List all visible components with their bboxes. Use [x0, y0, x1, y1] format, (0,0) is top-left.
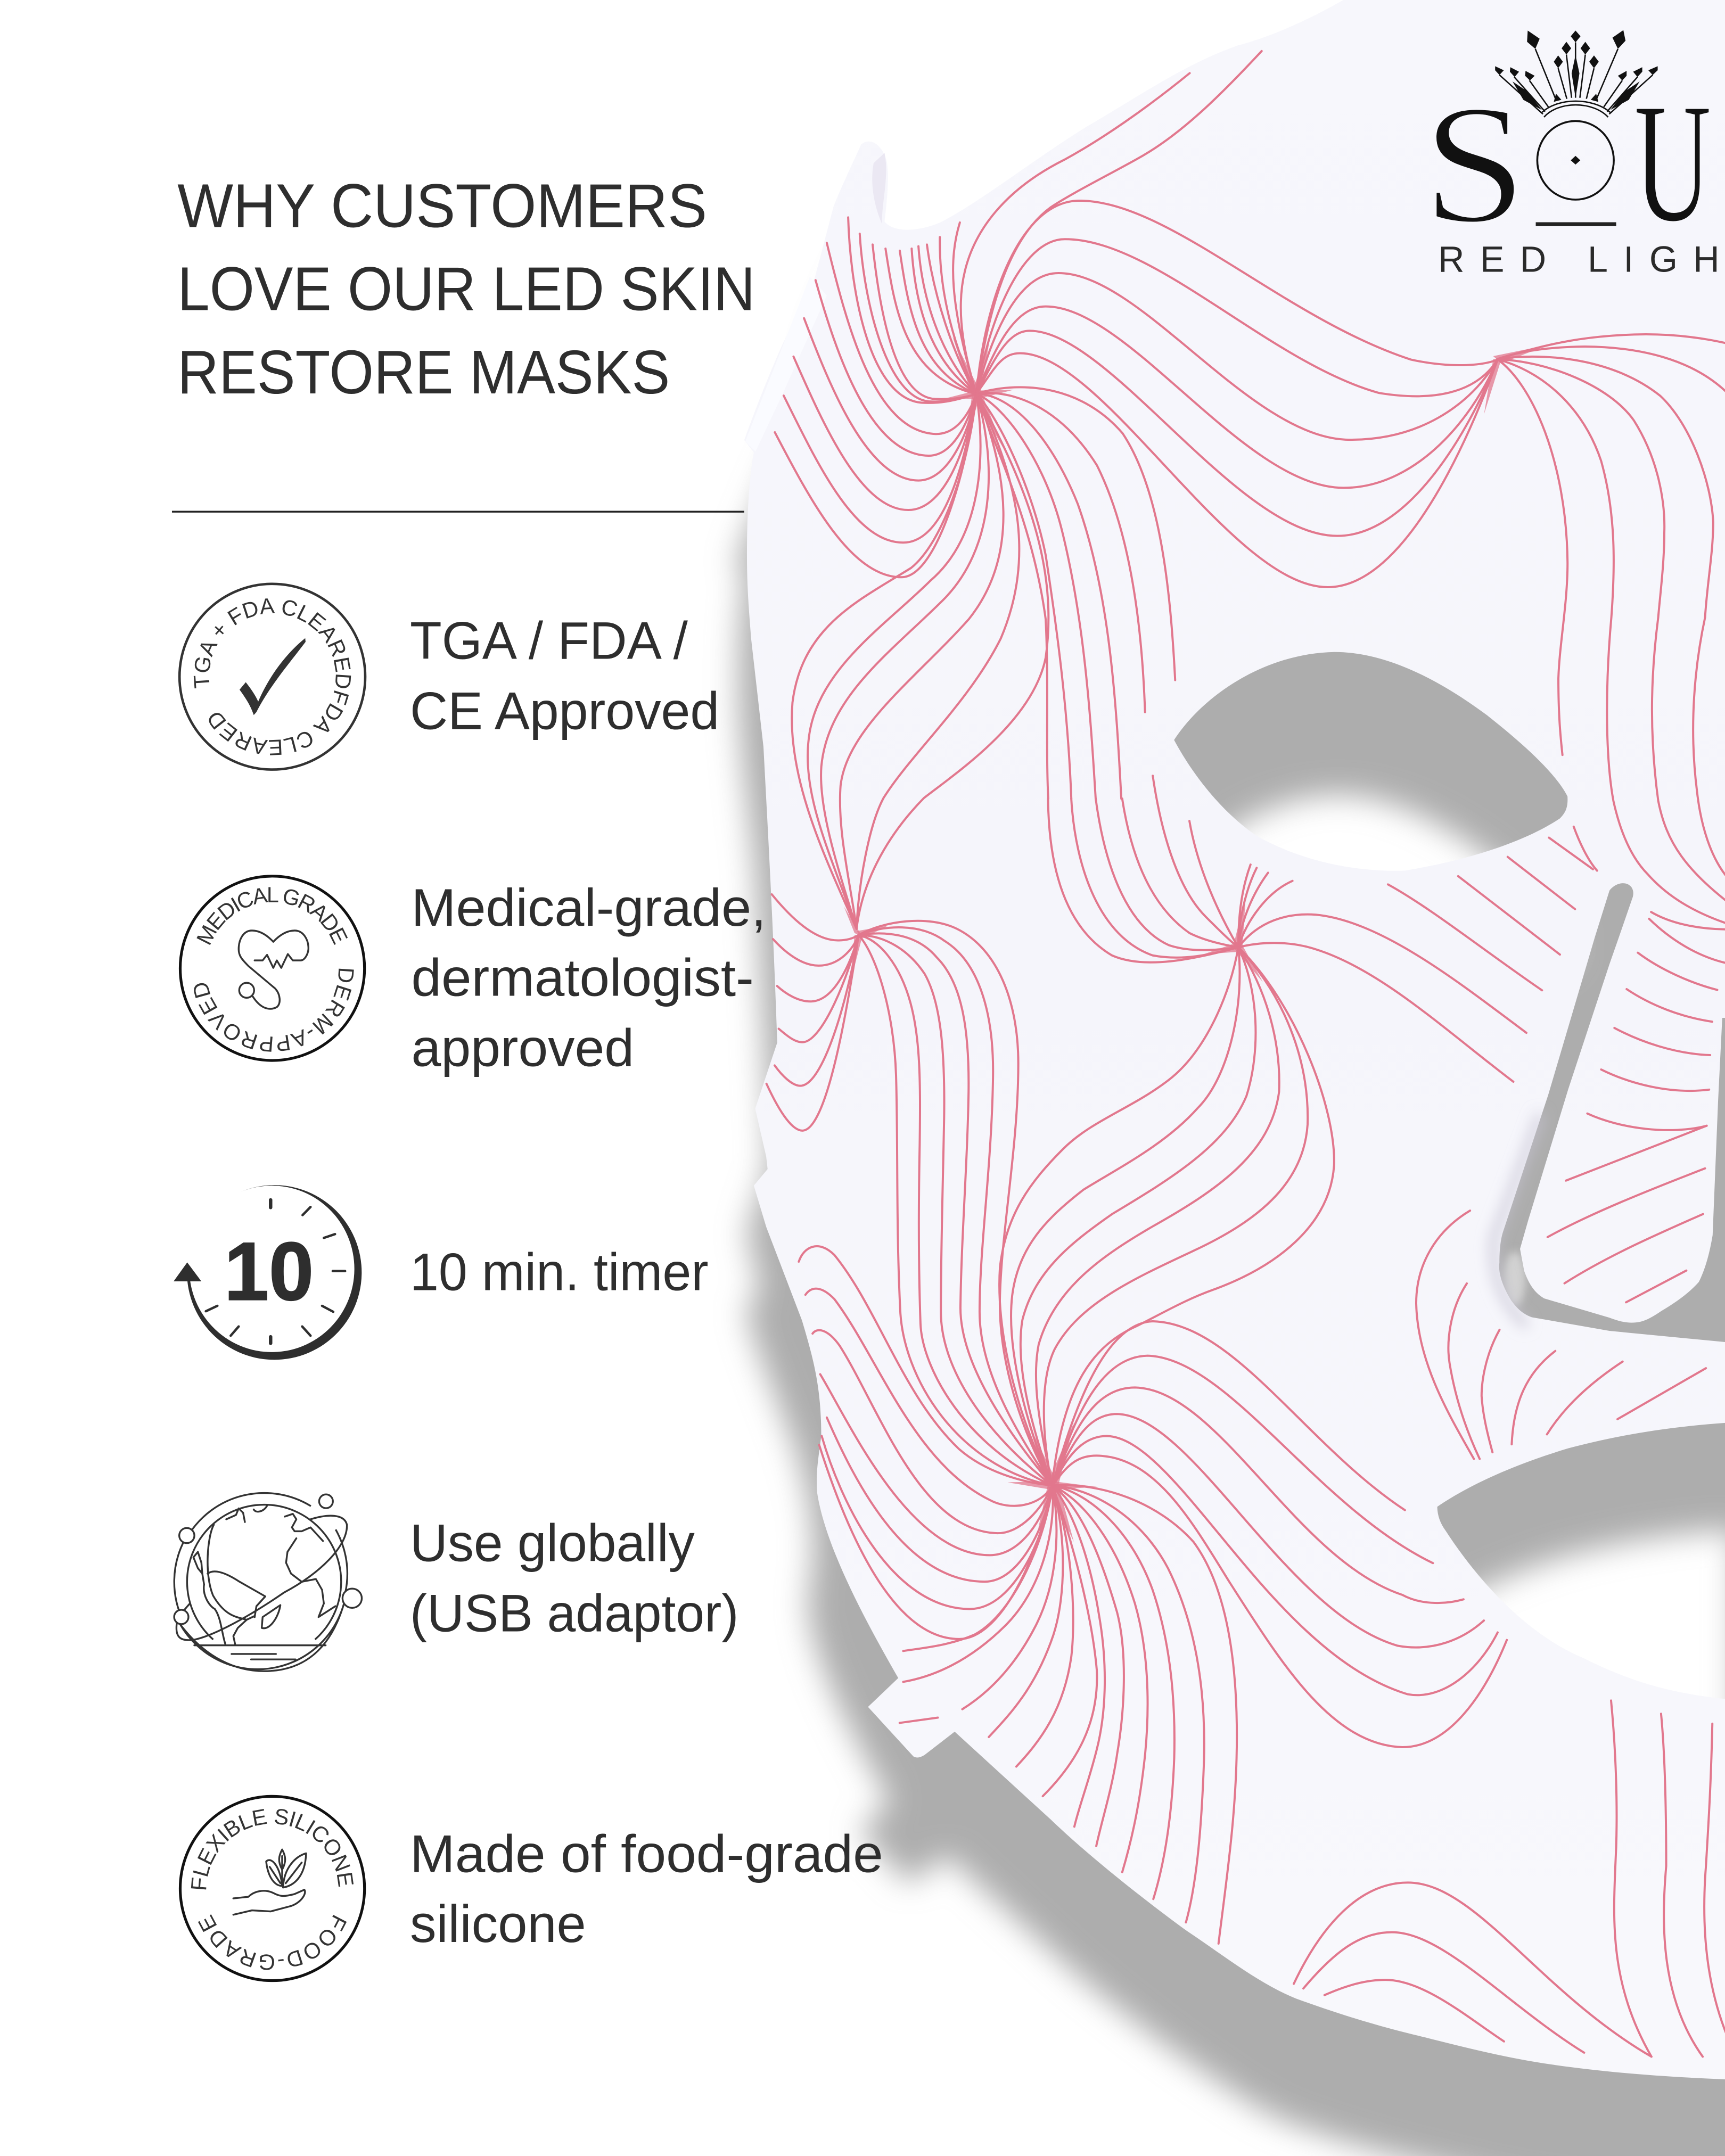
nose flap lines	[1548, 912, 1725, 1302]
nose slit light patch	[1504, 1252, 1525, 1307]
icon: approval check badge: TGA + FDA CLEAREDFDA CLEARED	[194, 598, 351, 755]
nose slit rim shadow	[1493, 1114, 1541, 1326]
icon: medical grade stethoscope heart badge	[179, 875, 366, 1062]
text: timer: 10 min. timer	[410, 1243, 709, 1302]
brand logo, cropped at right edge	[1423, 30, 1725, 279]
mask drop shadow	[720, 478, 1725, 2156]
text: use globally: Use globally	[410, 1514, 695, 1573]
heading: LOVE OUR LED SKIN	[177, 254, 755, 324]
icon: 10 minute timer dial	[174, 1185, 362, 1360]
divider	[172, 511, 744, 512]
pink swirl line pattern	[767, 51, 1725, 2071]
text: use globally	[410, 1514, 738, 1643]
swirls C and D, cheek	[767, 776, 1526, 1485]
mask body with eye, nose and mouth cut-outs	[744, 0, 1725, 2080]
text: medical grade: approved	[412, 1018, 634, 1077]
icon: medical grade stethoscope heart badge: DERM-APPROVED	[194, 969, 354, 1052]
icon: 10 minute timer dial: 10	[224, 1225, 314, 1318]
text: medical grade: dermatologist-	[412, 949, 754, 1008]
text: food-grade silicone	[410, 1824, 883, 1954]
upper-left strap tab shading	[872, 153, 886, 224]
icon: globe with orbit	[174, 1493, 362, 1671]
logo crown	[1495, 30, 1658, 226]
text: food-grade silicone: silicone	[410, 1895, 586, 1954]
swirl B, forehead right fan	[1484, 334, 1725, 927]
item: TGA / FDA / CE approved	[178, 582, 719, 771]
icon: hand and leaves silicone badge	[180, 1796, 365, 1981]
text: approvals	[410, 612, 719, 740]
text: use globally: (USB adaptor)	[410, 1584, 738, 1643]
icon: hand and leaves silicone badge: FLEXIBLE SILICONE	[191, 1809, 354, 1890]
text: medical grade: Medical-grade,	[412, 878, 766, 937]
text: food-grade silicone: Made of food-grade	[410, 1824, 883, 1883]
swirl E, jaw	[799, 1246, 1507, 1944]
swirl A waves to swirl B, and down to swirl D and C	[792, 201, 1498, 929]
under-eye short lines	[1388, 827, 1597, 990]
icon: medical grade stethoscope heart badge: MEDICAL GRADE	[196, 887, 348, 945]
logo letter S: S	[1423, 70, 1527, 259]
item: medical grade	[179, 875, 766, 1077]
heading: WHY CUSTOMERS	[177, 171, 707, 240]
item: timer	[174, 1185, 709, 1360]
text: approvals: CE Approved	[410, 681, 719, 740]
logo letter O with centre dot and underline	[1536, 121, 1616, 226]
item: use globally	[174, 1493, 738, 1671]
text: medical grade	[412, 878, 766, 1077]
chin and upper-lip lines	[1294, 1211, 1725, 2071]
silicone LED mask	[744, 0, 1725, 2080]
icon: hand and leaves silicone badge: FOOD-GRADE	[198, 1914, 347, 1970]
text: approvals: TGA / FDA /	[410, 612, 688, 671]
item: food-grade silicone	[179, 1795, 883, 1982]
temple strap band	[745, 277, 827, 451]
heading	[177, 171, 755, 407]
heading: RESTORE MASKS	[177, 338, 670, 407]
swirl A, top-left fans	[775, 51, 1262, 577]
